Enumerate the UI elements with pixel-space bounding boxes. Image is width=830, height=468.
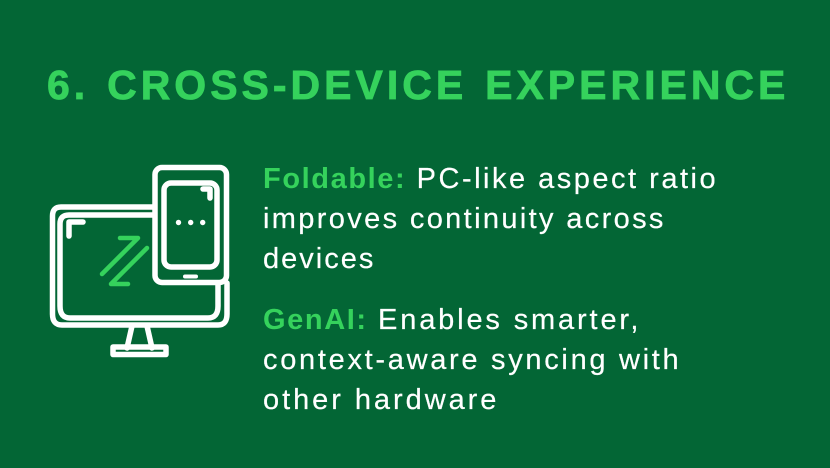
title: 6. CROSS-DEVICE EXPERIENCE (47, 62, 789, 108)
text block: genai: other hardware (263, 384, 499, 416)
text block: foldable: improves continuity across (263, 203, 666, 235)
icon: monitor (52, 207, 227, 354)
icon: phone dots (176, 220, 205, 225)
text block: genai: context-aware syncing with (263, 344, 681, 376)
icon: phone (155, 168, 226, 282)
text block: genai: GenAI: Enables smarter, (263, 304, 641, 336)
text block: foldable: devices (263, 243, 375, 275)
icon: monitor and phone (50, 164, 230, 358)
icon: sync arrows (102, 238, 147, 284)
text block: genai (263, 304, 681, 416)
text block: foldable (263, 163, 718, 275)
text block: foldable: Foldable: PC-like aspect ratio (263, 163, 718, 195)
